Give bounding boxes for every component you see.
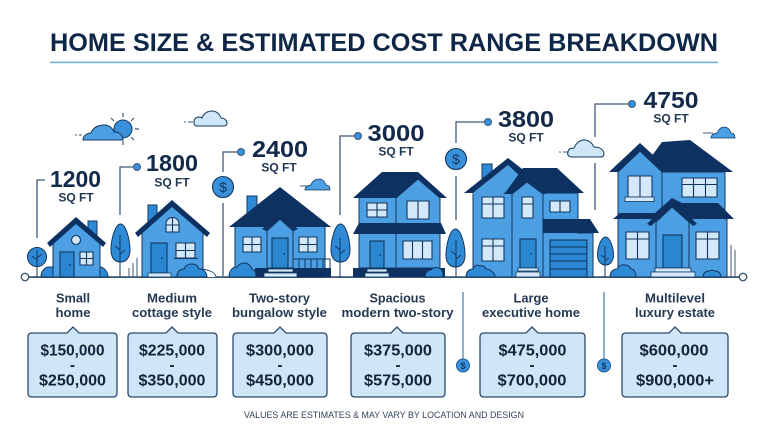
- column: medium cottage: Medium: [147, 292, 197, 306]
- column: multilevel luxury estate: $900,000+: [636, 372, 714, 390]
- grass lines: [129, 258, 137, 277]
- callout: 3800 sq ft: 3800: [498, 106, 554, 132]
- ground line: [29, 276, 740, 278]
- column: small home: [28, 292, 117, 397]
- icon: dollar coin 2400: $: [219, 179, 227, 195]
- callout: 2400 sq ft: SQ FT: [261, 160, 297, 174]
- column: small home: -: [70, 357, 75, 374]
- house: 1200 sq ft small home: [41, 217, 108, 277]
- column: multilevel luxury estate: Multilevel: [645, 292, 705, 306]
- divider with coin: right: $: [601, 361, 607, 371]
- callout: 3000 sq ft: [340, 120, 424, 215]
- column: spacious modern two-story: -: [395, 357, 401, 374]
- footer note: VALUES ARE ESTIMATES & MAY VARY BY LOCATION AND DESIGN: [244, 410, 524, 420]
- column: multilevel luxury estate: [622, 292, 728, 397]
- column: large executive home: [480, 292, 585, 397]
- column: spacious modern two-story: Spacious: [370, 292, 426, 306]
- icon: small cloud right: [703, 127, 735, 138]
- tree: oval 4: [446, 229, 465, 277]
- column: medium cottage: [128, 292, 217, 397]
- house: 3800 sq ft executive: [464, 158, 599, 277]
- callout: 1200 sq ft: [37, 166, 101, 238]
- divider with coin: left: [456, 292, 470, 372]
- column: small home: home: [56, 306, 91, 320]
- icon: light cloud right: [559, 140, 604, 157]
- tree: round: [28, 248, 46, 277]
- callout: 1200 sq ft: SQ FT: [58, 190, 94, 204]
- column: spacious modern two-story: $375,000: [364, 342, 432, 360]
- column: two-story bungalow: [232, 292, 327, 397]
- callout: 4750 sq ft: SQ FT: [653, 112, 689, 126]
- tree: oval 2: [111, 224, 130, 277]
- ground end marker right: [739, 273, 747, 281]
- column: medium cottage: $225,000: [139, 342, 205, 360]
- column: large executive home: $700,000: [498, 372, 566, 390]
- icon: small cloud middle: [300, 179, 330, 190]
- house: 3000 sq ft two-story: [353, 172, 447, 277]
- column: small home: $250,000: [39, 372, 106, 390]
- icon: dollar coin 2400: [212, 176, 234, 276]
- column: medium cottage: $350,000: [138, 372, 206, 390]
- callout: 1800 sq ft: SQ FT: [154, 176, 190, 190]
- callout: 1800 sq ft: 1800: [146, 150, 198, 176]
- title: HOME SIZE & ESTIMATED COST RANGE BREAKDOWN: [50, 29, 718, 57]
- tree: oval 3: [331, 224, 350, 277]
- column: large executive home: $475,000: [498, 342, 566, 360]
- callout: 4750 sq ft: [595, 87, 698, 210]
- ground end marker left: [21, 273, 29, 281]
- column: spacious modern two-story: $575,000: [364, 372, 432, 390]
- column: multilevel luxury estate: $600,000: [640, 342, 708, 360]
- callout: 4750 sq ft: 4750: [644, 87, 698, 113]
- callout: 3000 sq ft: 3000: [368, 120, 424, 146]
- callout: 2400 sq ft: 2400: [252, 136, 308, 162]
- column: large executive home: Large: [514, 292, 549, 306]
- column: small home: $150,000: [40, 342, 104, 360]
- column: multilevel luxury estate: -: [672, 357, 678, 374]
- column: medium cottage: -: [169, 357, 175, 374]
- house: 1800 sq ft cottage: [135, 200, 216, 277]
- icon: light cloud: [184, 111, 227, 126]
- divider with coin: right: [598, 292, 610, 372]
- column: large executive home: -: [529, 357, 535, 374]
- callout: 3800 sq ft: [456, 106, 554, 144]
- column: two-story bungalow: $450,000: [246, 372, 314, 390]
- callout: 3800 sq ft: SQ FT: [508, 130, 544, 144]
- divider with coin: left: $: [460, 361, 466, 371]
- house: 4750 sq ft luxury estate: [609, 140, 735, 277]
- column: spacious modern two-story: modern two-story: [342, 306, 454, 320]
- icon: cloud with sun: [75, 113, 139, 145]
- callout: 2400 sq ft: [223, 136, 308, 174]
- tree: oval 5: [598, 237, 614, 277]
- house: 2400 sq ft bungalow: [229, 187, 331, 277]
- column: multilevel luxury estate: luxury estate: [635, 306, 715, 320]
- column: small home: Small: [56, 292, 90, 306]
- column: medium cottage: cottage style: [132, 306, 212, 320]
- callout: 3000 sq ft: SQ FT: [378, 144, 414, 158]
- column: two-story bungalow: Two-story: [249, 292, 310, 306]
- callout: 1800 sq ft: [120, 150, 198, 215]
- column: two-story bungalow: $300,000: [246, 342, 314, 360]
- callout: 1200 sq ft: 1200: [50, 166, 101, 192]
- column: two-story bungalow: bungalow style: [232, 306, 327, 320]
- column: two-story bungalow: -: [277, 357, 283, 374]
- icon: dollar coin 3800: $: [452, 151, 460, 167]
- icon: dollar coin 3800: [446, 148, 466, 220]
- column: large executive home: executive home: [482, 306, 580, 320]
- title underline: [50, 62, 718, 63]
- column: spacious modern two-story: [342, 292, 454, 397]
